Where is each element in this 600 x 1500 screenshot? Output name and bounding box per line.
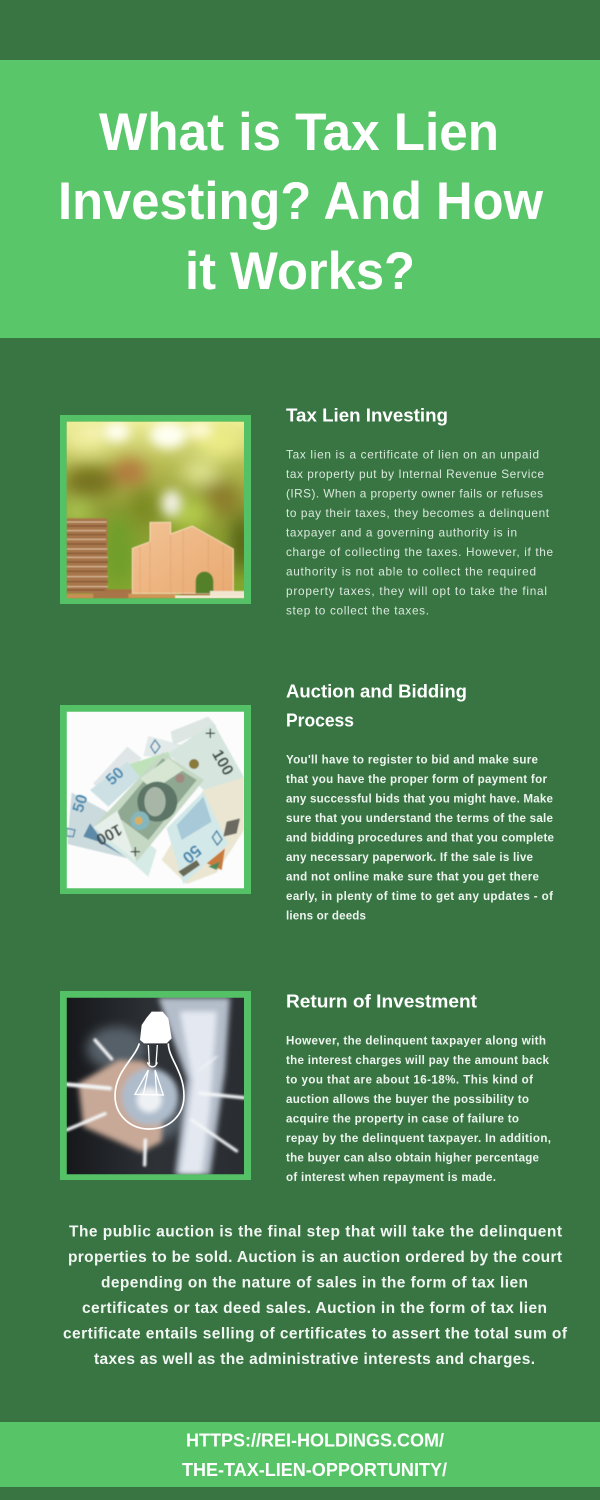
text block: and bidding procedures and that you complete <box>286 831 555 844</box>
icon: banknotes: 50 <box>103 764 128 789</box>
text block: charge of collecting the taxes. However, if the <box>286 545 553 559</box>
text block <box>286 1034 551 1184</box>
text block <box>286 447 553 617</box>
icon: banknotes: 50 <box>179 841 205 867</box>
text block: that you have the proper form of payment for <box>286 773 547 786</box>
closing paragraph: properties to be sold. Auction is an auction ordered by the court <box>68 1249 562 1266</box>
title: What is Tax Lien <box>99 103 499 162</box>
closing paragraph <box>63 1224 568 1368</box>
heading: Return of Investment <box>286 992 477 1012</box>
title: it Works? <box>185 242 415 301</box>
panel: tax lien investing image <box>60 415 252 604</box>
closing paragraph: certificate entails selling of certificates to assert the total sum of <box>63 1325 568 1342</box>
icon: light rays <box>67 1040 244 1165</box>
text block: to pay their taxes, they becomes a delinquent <box>286 506 550 520</box>
icon: banknotes <box>67 717 244 884</box>
text block: repay by the delinquent taxpayer. In addition, <box>286 1132 551 1145</box>
text block: step to collect the taxes. <box>286 603 429 617</box>
footer banner <box>0 1422 600 1487</box>
title banner <box>0 60 600 338</box>
text block: any successful bids that you might have. Make <box>286 792 554 805</box>
source url <box>182 1430 447 1480</box>
text block: auction allows the buyer the possibility to <box>286 1093 529 1106</box>
text block: authority is not able to collect the required <box>286 564 536 578</box>
heading: Process <box>286 711 354 731</box>
panel: return of investment text <box>286 992 551 1184</box>
title: Investing? And How <box>58 172 544 231</box>
text block: property taxes, they will opt to take the final <box>286 584 547 598</box>
text block: early, in plenty of time to get any updates - of <box>286 890 553 903</box>
text block: taxpayer and a governing authority is in <box>286 525 517 539</box>
text block: and not online make sure that you get there <box>286 870 540 883</box>
icon: banknotes: 50 <box>70 792 92 815</box>
icon: coin stack <box>67 518 212 598</box>
closing paragraph: certificates or tax deed sales. Auction in the form of tax lien <box>82 1300 547 1317</box>
closing paragraph: depending on the nature of sales in the form of tax lien <box>101 1274 528 1292</box>
panel: return of investment image <box>60 991 251 1180</box>
text block: tax property put by Internal Revenue Service <box>286 467 544 481</box>
icon: light bulb <box>115 1012 184 1129</box>
icon: banknotes: 100 <box>208 747 236 779</box>
source url: HTTPS://REI-HOLDINGS.COM/ <box>186 1430 444 1451</box>
text block: sure that you understand the terms of the sale <box>286 812 554 825</box>
panel: auction text <box>286 682 555 922</box>
closing paragraph: taxes as well as the administrative interests and charges. <box>94 1351 535 1368</box>
source url: THE-TAX-LIEN-OPPORTUNITY/ <box>182 1459 447 1480</box>
text block: Tax lien is a certificate of lien on an unpaid <box>286 447 539 461</box>
icon: banknotes: 100 <box>93 820 125 848</box>
panel: tax lien investing text <box>286 406 553 617</box>
text block <box>286 753 555 922</box>
title <box>58 103 544 301</box>
text block: You'll have to register to bid and make sure <box>286 753 539 766</box>
heading: Auction and Bidding <box>286 682 467 702</box>
text block: However, the delinquent taxpayer along with <box>286 1034 546 1047</box>
text block: any necessary paperwork. If the sale is live <box>286 851 534 864</box>
text block: the buyer can also obtain higher percentage <box>286 1151 540 1164</box>
heading: Tax Lien Investing <box>286 406 448 426</box>
panel: auction image <box>60 705 251 894</box>
text block: acquire the property in case of failure to <box>286 1112 519 1125</box>
heading <box>286 682 467 731</box>
icon: wooden house <box>132 522 245 598</box>
text block: liens or deeds <box>286 909 366 922</box>
text block: (IRS). When a property owner fails or refuses <box>286 486 543 500</box>
closing paragraph: The public auction is the final step that will take the delinquent <box>69 1224 562 1241</box>
text block: to you that are about 16-18%. This kind of <box>286 1073 533 1086</box>
text block: the interest charges will pay the amount back <box>286 1054 550 1067</box>
text block: of interest when repayment is made. <box>286 1171 496 1184</box>
